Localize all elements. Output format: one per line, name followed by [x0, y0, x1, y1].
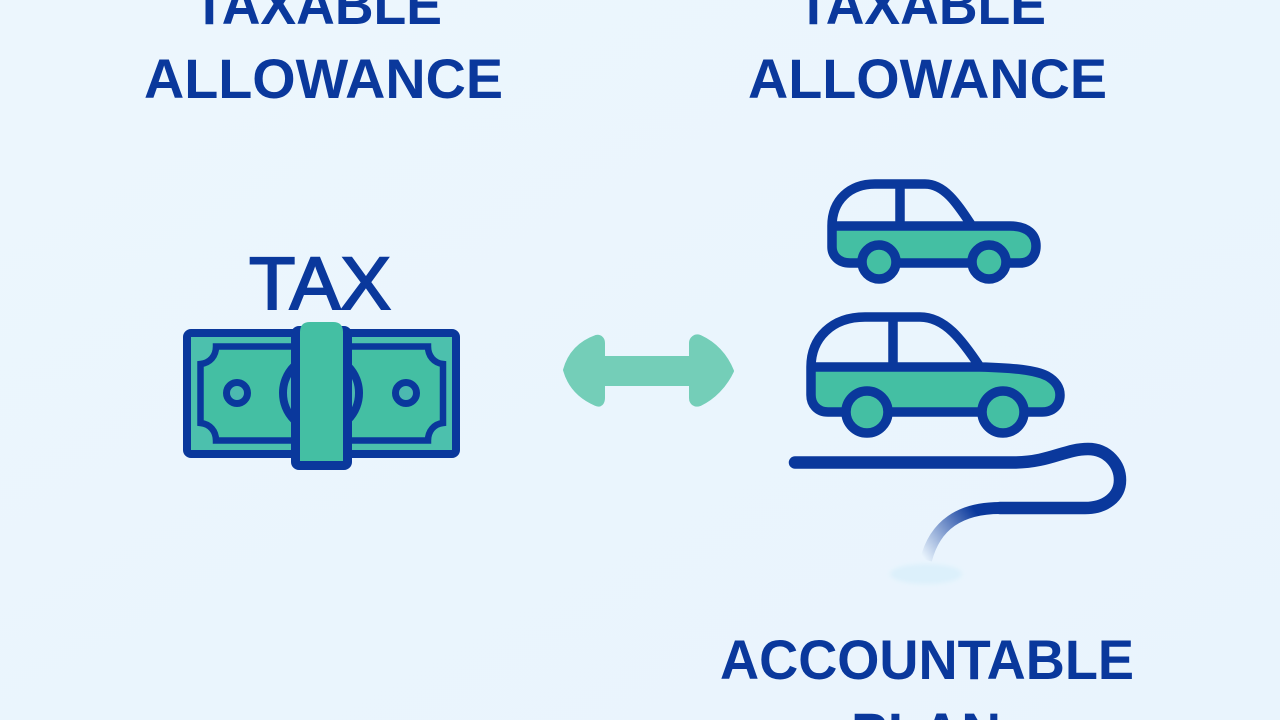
heading: left taxable allowance: ALLOWANCE — [144, 47, 503, 110]
heading: right taxable allowance: ALLOWANCE — [748, 47, 1107, 110]
heading: left taxable allowance — [144, 0, 503, 110]
icon: small car — [832, 184, 1036, 279]
heading: accountable plan — [720, 628, 1134, 720]
heading: right taxable allowance — [748, 0, 1107, 110]
icon: banknote with band — [187, 322, 456, 466]
icon: large car — [811, 317, 1060, 433]
arrow: double headed — [565, 336, 732, 405]
label: tax: TAX — [249, 242, 391, 325]
heading: accountable plan: ACCOUNTABLE — [720, 628, 1134, 691]
icon: winding road line — [795, 449, 1120, 584]
